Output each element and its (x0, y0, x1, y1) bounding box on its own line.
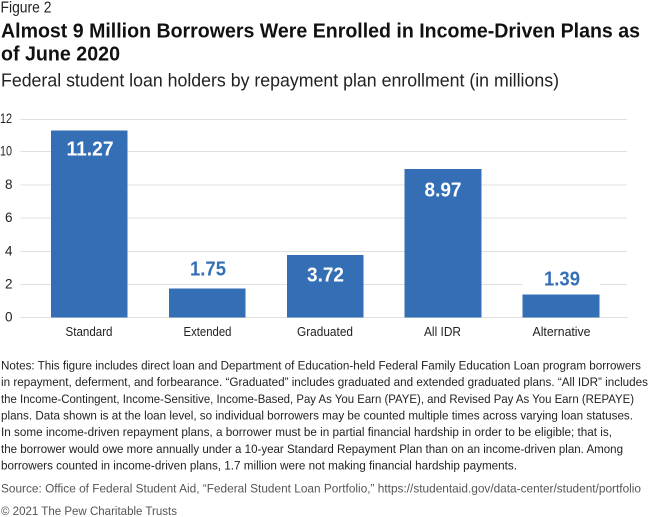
bar: Graduated: Graduated (297, 324, 353, 339)
bar: Standard: 11.27 (66, 139, 114, 161)
title: of June 2020 (1, 43, 120, 66)
y axis labels: 10 (0, 144, 12, 158)
notes (1, 358, 648, 472)
title (1, 20, 640, 66)
notes: the borrower would owe more annually under a 10-year Standard Repayment Plan than on an income-driven plan. Among (1, 442, 623, 456)
y axis labels: 12 (0, 111, 12, 126)
bar: All IDR: 8.97 (424, 180, 462, 202)
bar: Standard (51, 130, 128, 339)
bar: Extended (169, 259, 246, 339)
bar: Alternative: Alternative (532, 324, 590, 339)
notes: borrowers counted in income-driven plans, 1.7 million were not making financial hardship payments. (1, 458, 517, 472)
bar: Graduated: 3.72 (307, 265, 344, 287)
y axis labels: 2 (5, 276, 13, 292)
y axis labels (0, 111, 13, 324)
notes: In some income-driven repayment plans, a borrower must be in partial financial hardship in order to be eligible; that is, (1, 425, 612, 439)
y axis labels: 8 (5, 177, 13, 192)
bar: Standard: Standard (66, 324, 112, 339)
subtitle: Federal student loan holders by repayment plan enrollment (in millions) (1, 71, 559, 91)
y axis labels: 6 (5, 210, 13, 225)
gridlines (20, 120, 628, 318)
notes: plans. Data shown is at the loan level, so individual borrowers may be counted multiple times across varying loan statuses. (1, 408, 633, 422)
figure label: Figure 2 (0, 0, 52, 16)
bar: Alternative (522, 269, 600, 339)
bar: All IDR: All IDR (424, 324, 461, 339)
source: Source: Office of Federal Student Aid, “Federal Student Loan Portfolio,” https://studentaid.gov/data-center/student/portfolio (1, 482, 641, 496)
bar chart (0, 111, 628, 339)
bar: Graduated (287, 255, 364, 339)
bar: All IDR (404, 169, 482, 339)
bar: Extended: 1.75 (190, 259, 226, 281)
bar: Alternative: 1.39 (544, 269, 580, 291)
y axis labels: 0 (5, 310, 13, 324)
y axis labels: 4 (5, 244, 13, 258)
bar: Extended: Extended (184, 324, 232, 339)
